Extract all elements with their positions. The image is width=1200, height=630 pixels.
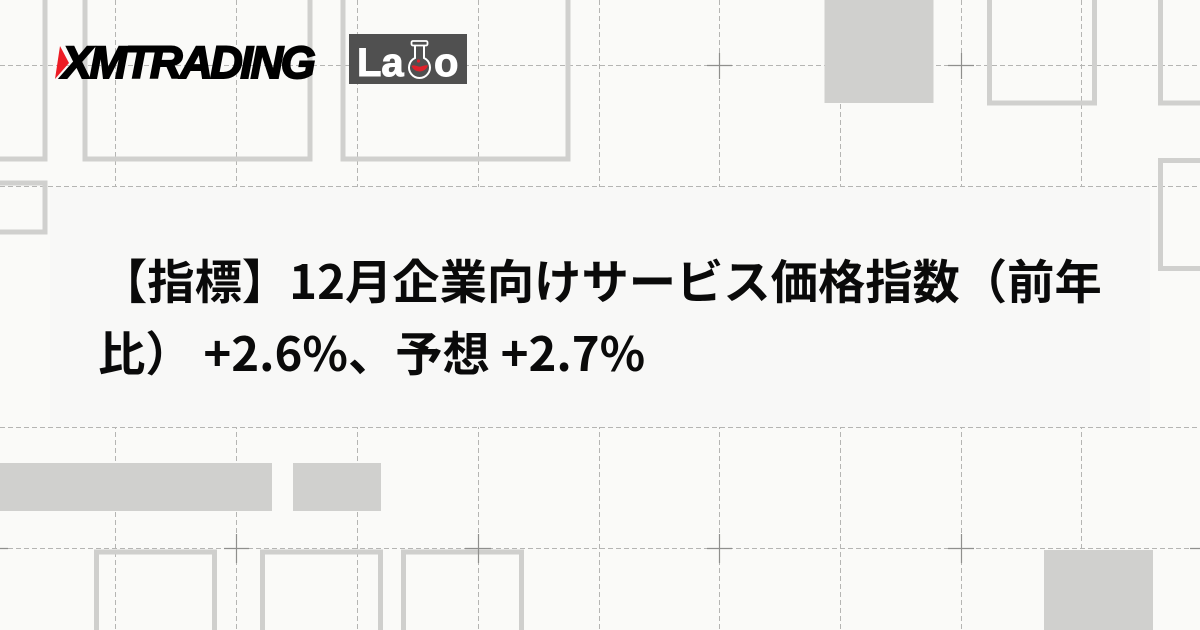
- title line 2: 比） +2.6%、予想 +2.7%: [98, 316, 645, 385]
- filled block: top right: [824, 0, 934, 103]
- panel: title backdrop: [50, 187, 1150, 427]
- filled bars: lower left: [0, 463, 381, 511]
- wordmark: o: o: [434, 41, 458, 85]
- outline squares: top left: [0, 0, 568, 232]
- title: [98, 244, 1102, 385]
- icon: flask: [409, 41, 430, 78]
- outline squares: bottom: [96, 552, 522, 630]
- icon: red arrow: [55, 46, 69, 79]
- title line 1: 【指標】12月企業向けサービス価格指数（前年: [100, 244, 1102, 313]
- filled block: bottom right: [1044, 550, 1153, 630]
- logo: XMTRADING: [55, 37, 315, 88]
- outline squares: top right: [990, 0, 1200, 268]
- logo: Labo: [349, 34, 467, 85]
- logo background: [349, 34, 467, 84]
- wordmark: La: La: [357, 41, 404, 85]
- wordmark: XMTRADING: XMTRADING: [59, 37, 315, 88]
